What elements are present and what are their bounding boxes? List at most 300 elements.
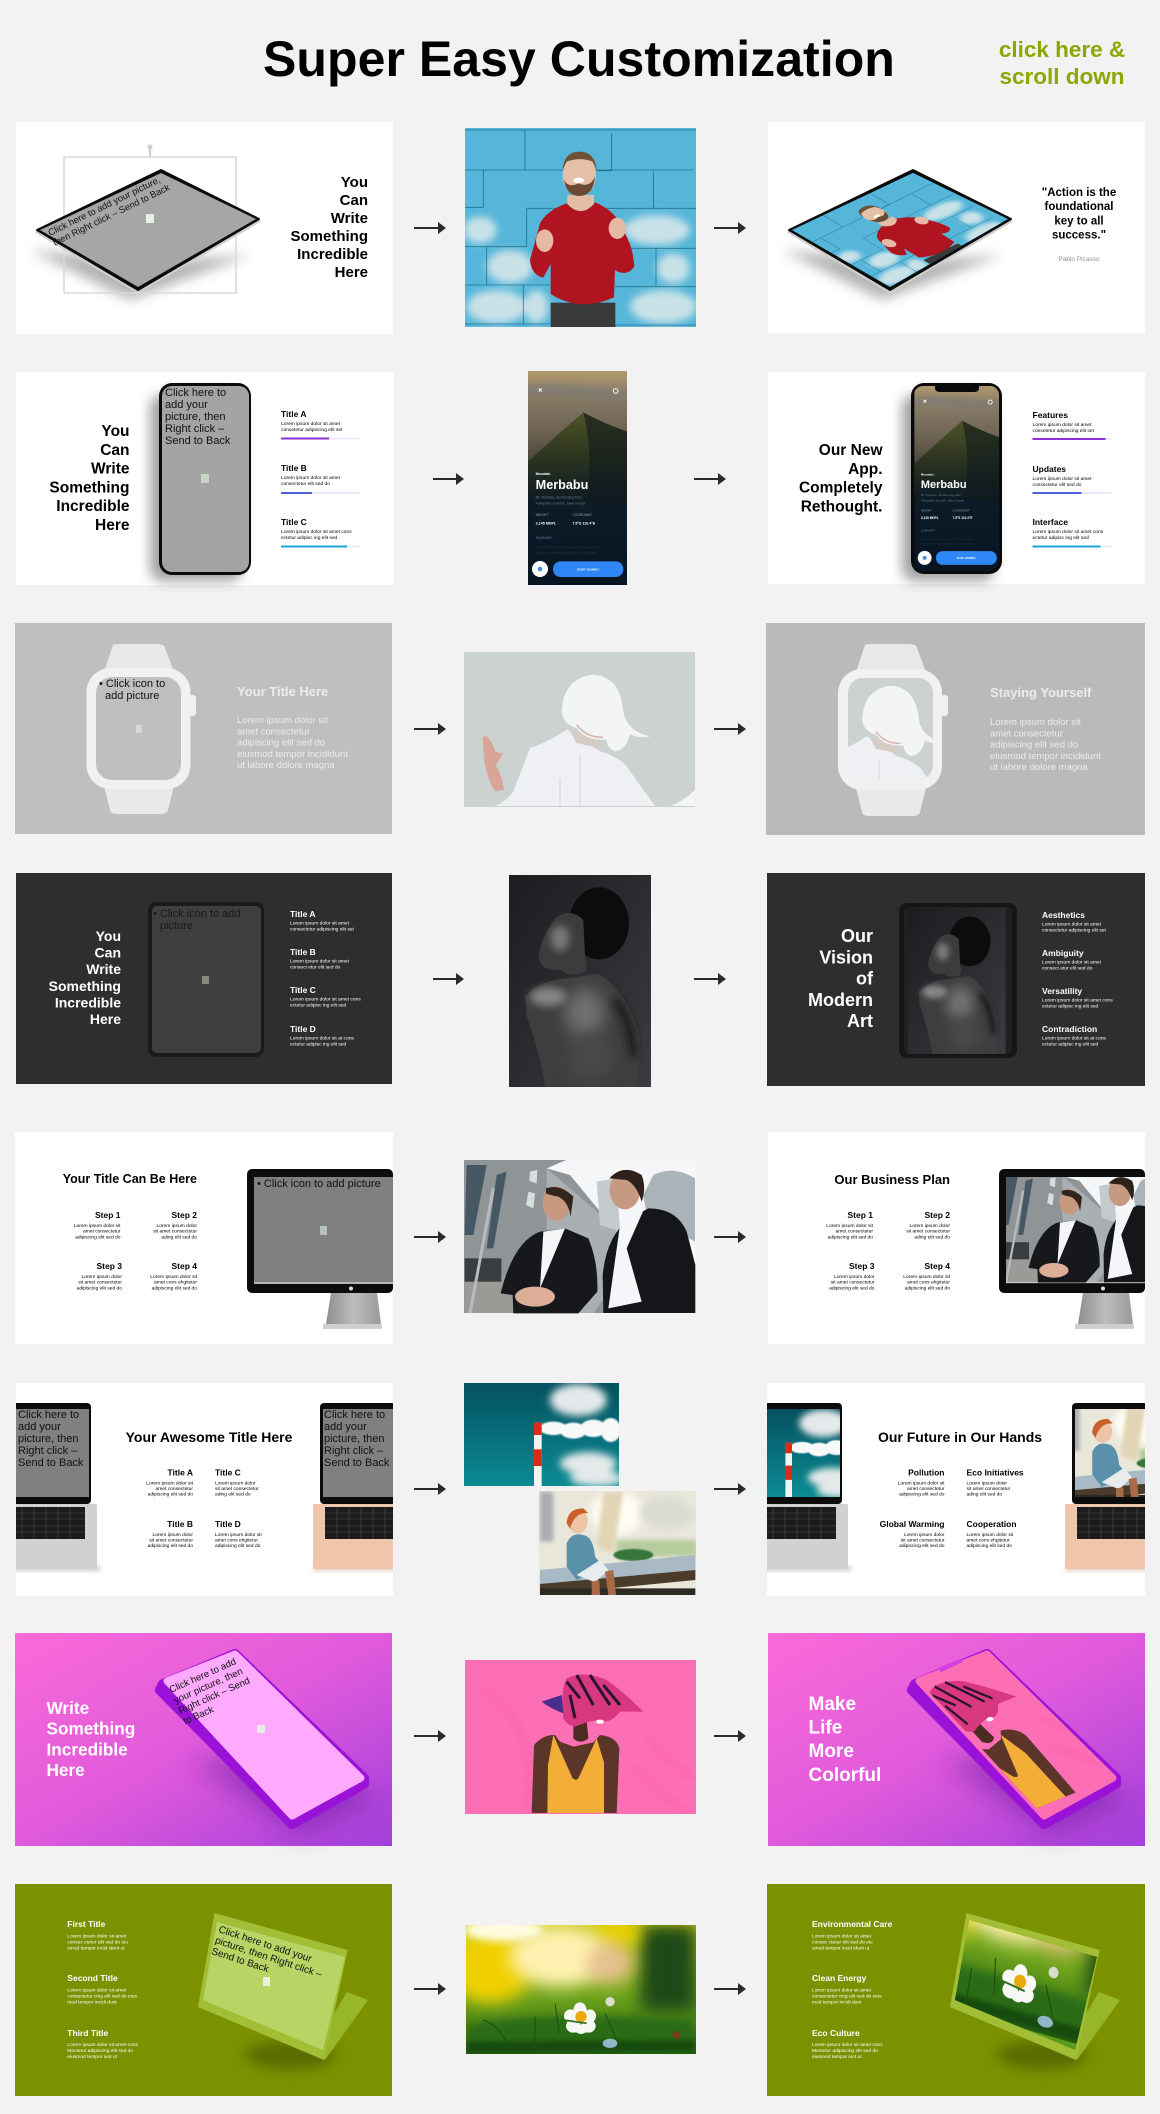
step 1: Step 1 [95, 1210, 121, 1220]
row 6 before panel: two laptop placeholders [10, 1383, 403, 1596]
phone placeholder text: Send to Back [165, 435, 231, 447]
item: First Title: consec ctetur elit sed do eiu [67, 1940, 128, 1946]
item: Global Warming: Global Warming [880, 1519, 944, 1529]
headline text: Write [91, 461, 130, 478]
item: Global Warming: adipiscing elit sed do [899, 1543, 945, 1549]
row 8 result panel: stand tablet with photo [767, 1884, 1145, 2096]
headline text: Modern [808, 990, 873, 1010]
step 1: Lorem ipsum dolor sit [826, 1223, 874, 1229]
row 7 source photo: woman with pink hair [465, 1660, 696, 1814]
step 1: amet consectetur [83, 1229, 121, 1235]
item: Title A: Title A [167, 1468, 193, 1478]
item: Title C: Title C [215, 1468, 241, 1478]
item: Title B: adipiscing elit sed do [148, 1543, 193, 1549]
tablet placeholder text: picture, then Right click – [214, 1935, 324, 1980]
item: Clean Energy [812, 1973, 882, 2006]
tablet placeholder text: Click here to add your [217, 1924, 314, 1965]
arrow [714, 723, 746, 735]
item: Eco Initiatives: sit amet consectetur [966, 1486, 1011, 1492]
item: Environmental Care: Lorem ipsum dolor sit amet [812, 1934, 872, 1940]
headline text: Something [46, 1719, 135, 1739]
arrow [414, 723, 446, 735]
headline text: Incredible [56, 498, 130, 515]
step 3: Step 3 [96, 1261, 122, 1271]
left laptop with chimney photo [767, 1403, 852, 1573]
row 3 result panel: watch with photo [766, 623, 1145, 835]
item: Clean Energy: consectetur cing elit sed do eius [812, 1994, 882, 2000]
watch placeholder text: • Click icon to [99, 678, 165, 690]
body text: adipiscing elit sed do [237, 738, 325, 749]
item: First Title: Lorem ipsum dolor sit amet [67, 1934, 127, 1940]
quote: foundational [1044, 201, 1114, 213]
item: Title D [290, 1024, 354, 1047]
headline text: Our New [819, 442, 883, 459]
item: Aesthetics [1042, 910, 1107, 933]
step 4: Step 4 [171, 1261, 197, 1271]
step 1 [74, 1210, 121, 1240]
item: Title B: consect etur elit sed do [290, 964, 341, 970]
step 3: Step 3 [849, 1261, 875, 1271]
phone placeholder text: Click here to add [168, 1656, 238, 1696]
item: Contradiction [1042, 1024, 1106, 1047]
right laptop placeholder text: Click here to [324, 1409, 385, 1421]
item: Title A: Lorem ipsum dolor sit [146, 1480, 194, 1486]
item: Title B: sit amet consectetur [149, 1538, 193, 1544]
item: Title B [290, 947, 350, 970]
item: Features: consetetur adipiscing elit set [1032, 428, 1095, 434]
step 2: Lorem ipsum dolor [909, 1223, 950, 1229]
phone placeholder text: Right click – [165, 423, 225, 435]
item: Title A [290, 909, 355, 932]
body text: amet consectetur [990, 728, 1063, 739]
item: Contradiction: Lorem ipsum dolor sit at cons [1042, 1036, 1106, 1042]
title: Staying Yourself [990, 685, 1092, 700]
item: Title A [146, 1468, 194, 1498]
item: Eco Initiatives [966, 1468, 1024, 1498]
step 3: sit amet consectetur [831, 1280, 875, 1286]
item: Title D: amet cons ehgitetur [215, 1538, 258, 1544]
title: Your Awesome Title Here [126, 1429, 293, 1445]
tablet placeholder text: Send to Back [210, 1946, 271, 1975]
step 4: amet cons ehgitetur [907, 1280, 950, 1286]
item: Pollution: Lorem ipsum dolor sit [898, 1480, 945, 1486]
item: Pollution: adipiscing elit sed do [899, 1492, 945, 1498]
phone placeholder text: Right click – Send [177, 1675, 252, 1717]
left laptop placeholder text: Click here to [18, 1409, 79, 1421]
step 4 [903, 1261, 951, 1291]
step 4: adipiscing elit sed do [905, 1285, 950, 1291]
watch placeholder text: add picture [105, 690, 159, 702]
item: Cooperation: Lorem ipsum dolor sit [966, 1532, 1014, 1538]
arrow [414, 1983, 446, 1995]
item: Global Warming [880, 1519, 945, 1549]
item: Title D: Lorem ipsum dolor sit at cons [290, 1036, 354, 1042]
item: Global Warming: sit amet consectetur [901, 1538, 945, 1544]
quote: success." [1052, 230, 1106, 242]
headline text: of [856, 969, 874, 989]
item: Ambiguity [1042, 948, 1102, 971]
headline text: Write [46, 1698, 89, 1718]
item: Versatility [1042, 986, 1113, 1009]
step 2 [153, 1210, 197, 1240]
item: Title D: Lorem ipsum dolor sit [215, 1532, 262, 1538]
callout: click here and scroll down: click here & [999, 37, 1125, 62]
headline text: Something [49, 978, 121, 994]
step 4 [150, 1261, 198, 1291]
step 4: Step 4 [924, 1261, 950, 1271]
row 8 before panel: stand tablet placeholder [15, 1884, 392, 2096]
step 2: sit amet consectetur [153, 1229, 197, 1235]
row 3 before panel: watch placeholder [15, 623, 392, 834]
item: Eco Culture [812, 2028, 883, 2060]
item: Title C: Lorem ipsum dolor sit amet cons [281, 529, 352, 535]
step 2 [906, 1210, 950, 1240]
monitor stand [326, 1293, 381, 1324]
item: Title D: Title D [215, 1519, 241, 1529]
row 5 result panel: monitor with photo [768, 1132, 1160, 1344]
arrow [714, 222, 746, 234]
item: Title B: Lorem ipsum dolor [152, 1532, 193, 1538]
body text: Lorem ipsum dolor sit [990, 717, 1081, 728]
headline text: Something [290, 228, 368, 245]
row 6 source photo: laughing boy on bench [538, 1490, 697, 1597]
phone placeholder text: picture, then [165, 411, 226, 423]
headline text: Incredible [297, 246, 368, 263]
quote: key to all [1054, 215, 1104, 227]
item: Title C [215, 1468, 259, 1498]
headline text: Here [90, 1011, 121, 1027]
item: Third Title: eiusmod tempor iunt ut [67, 2054, 118, 2060]
step 1 [826, 1210, 874, 1240]
item: Eco Culture: Lorem ipsum dolor sit amet cons [812, 2042, 883, 2048]
item: Updates [1032, 464, 1112, 494]
title: Your Title Can Be Here [63, 1172, 197, 1186]
item: First Title: First Title [67, 1919, 106, 1929]
item: Features: Lorem ipsum dolor sit amet [1032, 422, 1092, 428]
title: Our Future in Our Hands [878, 1429, 1042, 1445]
headline text: Rethought. [801, 498, 882, 515]
arrow [714, 1730, 746, 1742]
headline text: Completely [799, 480, 883, 497]
arrow [714, 1983, 746, 1995]
step 1: Lorem ipsum dolor sit [74, 1223, 121, 1229]
item: Title A: amet consectetur [155, 1486, 193, 1492]
item: Title B: Lorem ipsum dolor sit amet [290, 958, 350, 964]
item: Environmental Care: smod tempor incid idunt ut [812, 1946, 870, 1952]
step 3: Lorem ipsum dolor [834, 1274, 875, 1280]
item: Title B: Title B [290, 947, 316, 957]
item: Clean Energy: Clean Energy [812, 1973, 867, 1983]
tablet placeholder text: then Right click – Send to Back [51, 182, 172, 248]
item: Title A [281, 409, 360, 440]
item: Second Title: Lorem ipsum dolor sit amet [67, 1988, 127, 1994]
title: Super Easy Customization [263, 31, 895, 87]
step 2: Step 2 [924, 1210, 950, 1220]
item: Pollution: Pollution [908, 1468, 944, 1478]
item: Ambiguity: consect etur elit sed do [1042, 965, 1093, 971]
item: Title B [148, 1519, 193, 1549]
row 8 source photo: daisy in grass [447, 1918, 697, 2054]
row 1 source photo: man in red sweater [463, 128, 697, 328]
step 2: Step 2 [171, 1210, 197, 1220]
row 1 result panel: tablet with photo [768, 122, 1145, 333]
step 3 [829, 1261, 875, 1291]
row 1 before panel: tablet placeholder [16, 122, 393, 334]
item: Versatility: Versatility [1042, 986, 1082, 996]
item: Clean Energy: mod tempor incidi dunt [812, 2000, 862, 2006]
item: Title B: consectetur elit sed do [281, 481, 330, 487]
item: Title A: consetetur adipiscing elit set [281, 427, 343, 433]
headline text: Here [46, 1760, 85, 1780]
step 1: Step 1 [847, 1210, 873, 1220]
step 3: Lorem ipsum dolor [81, 1274, 122, 1280]
headline text: Here [335, 264, 368, 281]
tablet placeholder text: • Click icon to add [153, 908, 241, 920]
item: Features [1032, 410, 1112, 440]
headline text: Incredible [55, 994, 121, 1010]
headline text: Write [331, 210, 368, 227]
item: Interface: Lorem ipsum dolor sit amet cons [1032, 529, 1104, 535]
headline text: App. [848, 461, 882, 478]
row 3 source photo: white-haired woman [463, 651, 697, 808]
item: Title C [281, 517, 360, 548]
headline text: Can [340, 192, 368, 209]
step 1: adipiscing elit sed do [75, 1234, 121, 1240]
item: Eco Initiatives: Lorem ipsum dolor [966, 1480, 1007, 1486]
headline text: Can [100, 442, 130, 459]
headline text: Art [847, 1011, 873, 1031]
row 5 source photo: two businessmen [463, 1158, 697, 1315]
row 6 result panel: two laptops with photos [767, 1383, 1145, 1596]
item: Third Title: Lorem ipsum dolor sit amet cons [67, 2042, 139, 2048]
item: Eco Initiatives: ading elit sed do [966, 1492, 1002, 1498]
item: Contradiction: Contradiction [1042, 1024, 1097, 1034]
row 2 before panel: phone placeholder [16, 372, 394, 585]
item: Third Title: Third Title [67, 2028, 108, 2038]
step 1: amet consectetur [835, 1229, 873, 1235]
item: Environmental Care: consec ctetur elit sed do eiu [812, 1940, 873, 1946]
item: Title A: consectetur adipiscing elit set [290, 926, 355, 932]
right laptop with boy photo [1063, 1403, 1145, 1574]
item: Features: Features [1032, 410, 1068, 420]
body text: Lorem ipsum dolor sit [237, 715, 328, 726]
step 2: ading elit sed do [914, 1234, 950, 1240]
step 2: ading elit sed do [161, 1234, 197, 1240]
item: Title C: ectetur adipisc ing elit sed [281, 535, 338, 541]
row 7 before panel: tilted phone placeholder [15, 1633, 392, 1846]
item: Eco Culture: Eco Culture [812, 2028, 860, 2038]
item: Title B [281, 463, 360, 494]
item: Title C: Title C [281, 517, 307, 527]
item: Title D [215, 1519, 262, 1549]
row 2 source photo: mountain app screen [528, 370, 628, 587]
title: Your Title Here [237, 684, 328, 699]
left laptop placeholder text: Send to Back [18, 1457, 84, 1469]
right laptop placeholder text: Send to Back [324, 1457, 390, 1469]
item: Eco Culture: Mectetur adipiscing elit sed do [812, 2048, 878, 2054]
right laptop placeholder text: add your [324, 1421, 367, 1433]
headline text: Incredible [46, 1739, 128, 1759]
item: Ambiguity: Ambiguity [1042, 948, 1084, 958]
item: Contradiction: ectetur adipisc ing elit sed [1042, 1041, 1099, 1047]
item: Pollution: amet consectetur [907, 1486, 945, 1492]
row 4 result panel: dark tablet with photo [767, 873, 1145, 1086]
left laptop [10, 1403, 100, 1571]
item: Title C [290, 985, 361, 1008]
arrow [433, 473, 464, 485]
item: Title C: ading elit sed do [215, 1492, 251, 1498]
item: Aesthetics: consectetur adipiscing elit set [1042, 927, 1107, 933]
right laptop placeholder text: picture, then [324, 1433, 385, 1445]
item: Cooperation: Cooperation [966, 1519, 1017, 1529]
item: Second Title [67, 1973, 137, 2006]
row 5 before panel: monitor placeholder [15, 1132, 393, 1344]
item: First Title [67, 1919, 128, 1952]
item: Title A: adipiscing elit sed do [148, 1492, 193, 1498]
right laptop [313, 1403, 403, 1571]
monitor placeholder text: • Click icon to add picture [257, 1178, 381, 1190]
phone placeholder text: your picture, then [172, 1666, 245, 1706]
step 2: sit amet consectetur [906, 1229, 950, 1235]
row 4 source photo: woman in black and white [508, 873, 652, 1088]
headline text: You [96, 928, 121, 944]
body text: eiusmod tempor incididunt [237, 749, 348, 760]
item: Interface [1032, 517, 1112, 548]
arrow [433, 973, 464, 985]
title: Our Business Plan [834, 1172, 950, 1187]
item: First Title: smod tempor incid idunt ut [67, 1946, 125, 1952]
item: Title B: Title B [281, 463, 307, 473]
step 4: amet cons ehgitetur [154, 1280, 197, 1286]
item: Global Warming: Lorem ipsum dolor [904, 1532, 945, 1538]
headline text: Write [86, 961, 121, 977]
item: Eco Initiatives: Eco Initiatives [966, 1468, 1024, 1478]
item: Second Title: consectetur cing elit sed do eius [67, 1994, 137, 2000]
body text: ut labore dolore magna [990, 762, 1088, 773]
left laptop placeholder text: picture, then [18, 1433, 79, 1445]
item: Title B: Lorem ipsum dolor sit amet [281, 475, 341, 481]
item: Title A: Title A [290, 909, 316, 919]
headline text: Vision [819, 947, 873, 967]
arrow [714, 1483, 746, 1495]
left laptop placeholder text: Right click – [18, 1445, 78, 1457]
row 7 result panel: tilted phone with photo [768, 1633, 1145, 1846]
body text: adipiscing elit sed do [990, 740, 1078, 751]
step 4: Lorem ipsum dolor sit [150, 1274, 198, 1280]
item: Title D: adipiscing elit sed do [215, 1543, 261, 1549]
arrow [714, 1231, 746, 1243]
step 3: adipiscing elit sed do [829, 1285, 875, 1291]
arrow [414, 1483, 446, 1495]
body text: eiusmod tempor incididunt [990, 751, 1101, 762]
item: Interface: Interface [1032, 517, 1068, 527]
callout: click here and scroll down: scroll down [999, 64, 1125, 89]
phone placeholder text: to Back [182, 1704, 216, 1727]
item: Second Title: mod tempor incidi dunt [67, 2000, 117, 2006]
headline text: Colorful [808, 1765, 881, 1786]
headline text: Something [49, 479, 130, 496]
item: Updates: consectetur elit sed do [1032, 482, 1082, 488]
left laptop placeholder text: add your [18, 1421, 61, 1433]
item: Cooperation: amet cons ehgitetur [966, 1538, 1010, 1544]
arrow [414, 1231, 446, 1243]
item: Cooperation: adipiscing elit sed do [966, 1543, 1012, 1549]
row 4 before panel: dark tablet placeholder [16, 873, 392, 1084]
step 3: sit amet consectetur [78, 1280, 122, 1286]
item: Third Title [67, 2028, 139, 2060]
tablet placeholder text: picture [160, 920, 193, 932]
item: Aesthetics: Lorem ipsum dolor sit amet [1042, 922, 1102, 928]
step 3 [77, 1261, 122, 1291]
item: Updates: Updates [1032, 464, 1066, 474]
headline text: Can [95, 945, 121, 961]
item: Title A: Title A [281, 409, 307, 419]
headline text: Our [841, 926, 873, 946]
right laptop placeholder text: Right click – [324, 1445, 384, 1457]
arrow [414, 1730, 446, 1742]
item: Clean Energy: Lorem ipsum dolor sit amet [812, 1988, 872, 1994]
item: Versatility: ectetur adipisc ing elit sed [1042, 1003, 1099, 1009]
item: Cooperation [966, 1519, 1017, 1549]
step 2: Lorem ipsum dolor [156, 1223, 197, 1229]
item: Title C: sit amet consectetur [215, 1486, 259, 1492]
step 4: adipiscing elit sed do [152, 1285, 197, 1291]
item: Aesthetics: Aesthetics [1042, 910, 1085, 920]
arrow [414, 222, 446, 234]
item: Title C: ectetur adipisc ing elit sed [290, 1002, 347, 1008]
headline text: Here [95, 517, 130, 534]
item: Title C: Title C [290, 985, 316, 995]
body text: ut labore dolore magna [237, 760, 335, 771]
phone placeholder text: Click here to [165, 387, 226, 399]
headline text: You [341, 174, 368, 191]
arrow [694, 973, 726, 985]
item: Interface: ectetur adipisc ing elit sed [1032, 535, 1089, 541]
phone placeholder text: add your [165, 399, 208, 411]
item: Title D: ectetur adipisc ing elit sed [290, 1041, 347, 1047]
headline text: More [808, 1741, 854, 1762]
arrow [694, 473, 726, 485]
item: Title A: Lorem ipsum dolor sit amet [290, 920, 350, 926]
row 2 result panel: phone with app [768, 372, 1145, 584]
step 3: adipiscing elit sed do [77, 1285, 122, 1291]
headline text: Life [808, 1718, 842, 1739]
item: Ambiguity: Lorem ipsum dolor sit amet [1042, 960, 1102, 966]
item: Title B: Title B [167, 1519, 193, 1529]
item: Title D: Title D [290, 1024, 316, 1034]
item: Eco Culture: eiusmod tempor iunt ut [812, 2054, 862, 2060]
item: Title C: Lorem ipsum dolor sit amet cons [290, 996, 361, 1002]
step 1: adipiscing elit sed do [828, 1234, 873, 1240]
item: Third Title: Mectetur adipiscing elit sed do [67, 2048, 133, 2054]
headline text: Make [808, 1694, 856, 1715]
quote: "Action is the [1042, 187, 1116, 199]
item: Second Title: Second Title [67, 1973, 118, 1983]
item: Title C: Lorem ipsum dolor [215, 1480, 256, 1486]
step 4: Lorem ipsum dolor sit [903, 1274, 951, 1280]
item: Updates: Lorem ipsum dolor sit amet [1032, 476, 1092, 482]
item: Environmental Care: Environmental Care [812, 1919, 893, 1929]
item: Versatility: Lorem ipsum dolor sit amet cons [1042, 998, 1113, 1004]
tablet placeholder text: Click here to add your picture, [46, 175, 162, 238]
item: Pollution [898, 1468, 945, 1498]
item: Environmental Care [812, 1919, 893, 1952]
body text: amet consectetur [237, 726, 310, 737]
row 6 source photo: factory chimney [463, 1382, 623, 1487]
headline text: You [101, 423, 130, 440]
item: Title A: Lorem ipsum dolor sit amet [281, 421, 341, 427]
quote author: Pablo Picasso [1058, 256, 1100, 263]
